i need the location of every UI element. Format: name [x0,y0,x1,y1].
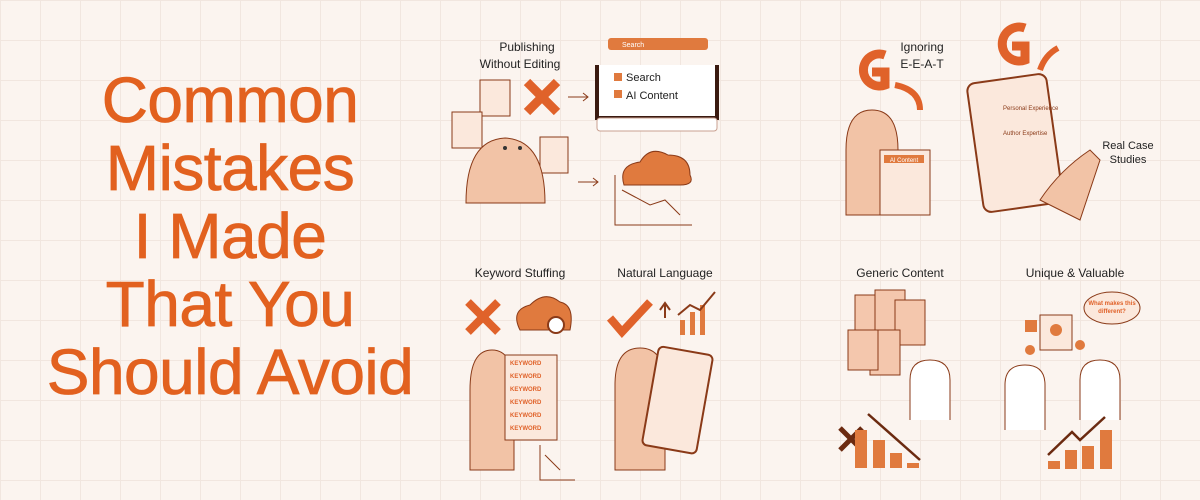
bar chart up [1048,417,1112,469]
label: Real Case [1102,140,1154,152]
character with keywords: KEYWORD [510,361,542,367]
heading: publishing: Without Editing [480,57,560,71]
speech bubble: different? [1098,309,1126,315]
documents pile [848,290,925,375]
monitor: AI Content [626,90,678,102]
character with keywords: KEYWORD [510,374,542,380]
label [1102,140,1154,166]
heading: Ignoring [900,40,944,54]
character holding document: AI Content [890,158,919,164]
monitor [597,65,717,131]
title: Should Avoid [47,336,413,408]
heading: E-E-A-T [900,57,944,71]
tablet with hand: Personal Experience [1003,106,1059,112]
headings [475,266,713,280]
checkmark [610,302,650,332]
title: Common [102,64,358,136]
tablet with hand: Author Expertise [1003,131,1048,137]
icon: G logos [863,27,1025,86]
cross [468,302,498,332]
icon: cross [527,82,557,112]
character with keywords: KEYWORD [510,400,542,406]
heading [900,40,944,71]
panel: publishing without editing [452,38,717,225]
idea collage [1025,315,1085,355]
title [47,64,413,408]
characters [910,360,1120,430]
headings: Natural Language [617,266,713,280]
character with tablet [615,346,713,470]
tablet with hand [966,73,1100,220]
icon: growth chart [660,292,715,335]
search bar [608,38,708,50]
character with keywords [470,350,575,480]
icon: angry cloud and chart [615,151,692,225]
heading: publishing: Publishing [499,40,555,54]
title: Mistakes [106,132,354,204]
character: sad blob [466,138,545,203]
arrow [895,48,1058,110]
headings: Generic Content [856,266,944,280]
panel: ignoring EEAT [846,27,1154,220]
headings: Unique & Valuable [1026,266,1125,280]
speech bubble [1084,292,1140,324]
panel: keyword stuffing vs natural language [468,266,715,480]
headings [856,266,1125,280]
arrows [568,93,598,186]
character with keywords: KEYWORD [510,426,542,432]
character with keywords: KEYWORD [510,413,542,419]
label: Studies [1110,154,1147,166]
cloud magnifier [517,297,571,333]
monitor: Search [626,72,661,84]
character holding document [846,110,930,215]
search bar: Search [622,42,644,49]
title: I Made [134,200,326,272]
headings: Keyword Stuffing [475,266,565,280]
speech bubble: What makes this [1088,301,1136,307]
character with keywords: KEYWORD [510,387,542,393]
panel: generic vs unique [840,266,1140,469]
icon: documents [452,80,568,173]
title: That You [106,268,354,340]
bar chart down [840,414,920,468]
heading: publishing [480,40,560,71]
